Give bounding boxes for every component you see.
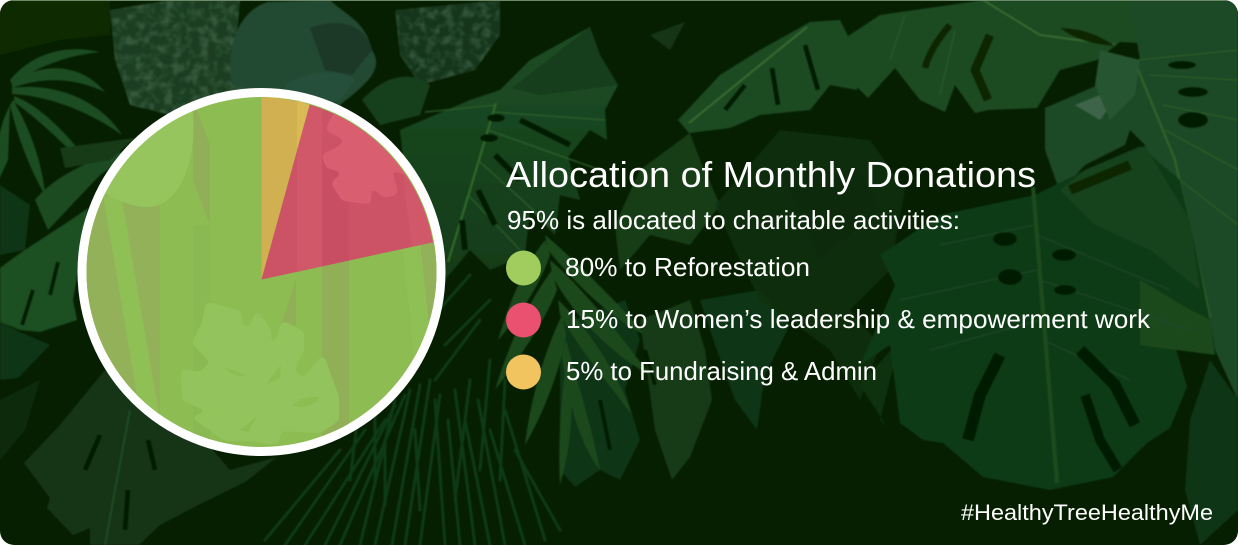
far-right lower leaf	[1185, 360, 1238, 545]
pie slice: 80% reforestation	[86, 97, 436, 447]
pie foliage: upper-left leaf lobe	[105, 111, 194, 207]
pie foliage: leaf holes	[225, 366, 320, 432]
bottom-left monstera leaf	[0, 370, 277, 545]
pie ring	[78, 88, 446, 456]
middle leaves behind heading	[615, 130, 905, 427]
large central-right monstera leaf	[860, 146, 1215, 490]
pie slice: 15% women's leadership	[262, 105, 433, 280]
subheading: 95% is allocated to charitable activities:	[507, 205, 960, 235]
left palm fronds	[0, 49, 135, 230]
legend item: reforestation	[506, 250, 810, 286]
central palm frond	[495, 235, 650, 485]
legend item: fundraising and admin: 5% to Fundraising & Admin	[566, 356, 877, 386]
central monstera leaf	[400, 27, 618, 280]
heading: Allocation of Monthly Donations	[506, 154, 1036, 195]
legend item: reforestation: 80% to Reforestation	[565, 252, 810, 282]
pie foliage: monstera leaf	[182, 303, 338, 443]
legend item: women's leadership: 15% to Women’s leadership & empowerment work	[566, 304, 1151, 334]
pie slice: 5% fundraising and admin	[262, 97, 310, 280]
top-left ferns and cabbage foliage	[0, 0, 500, 125]
pie foliage texture: green bands	[86, 110, 436, 444]
bottom-centre palm fronds	[265, 275, 560, 545]
hashtag: #HealthyTreeHealthyMe	[961, 500, 1213, 525]
right monstera leaf	[1045, 0, 1238, 400]
top edge highlight	[0, 0, 1238, 1]
pie chart	[70, 85, 446, 460]
left monstera leaf	[0, 185, 88, 380]
pie foliage: red-slice leaf	[297, 104, 433, 272]
upper-centre monstera leaf	[650, 20, 860, 133]
central monstera lobes	[560, 290, 790, 487]
top monstera leaf	[830, 0, 1140, 113]
legend	[506, 250, 1151, 390]
